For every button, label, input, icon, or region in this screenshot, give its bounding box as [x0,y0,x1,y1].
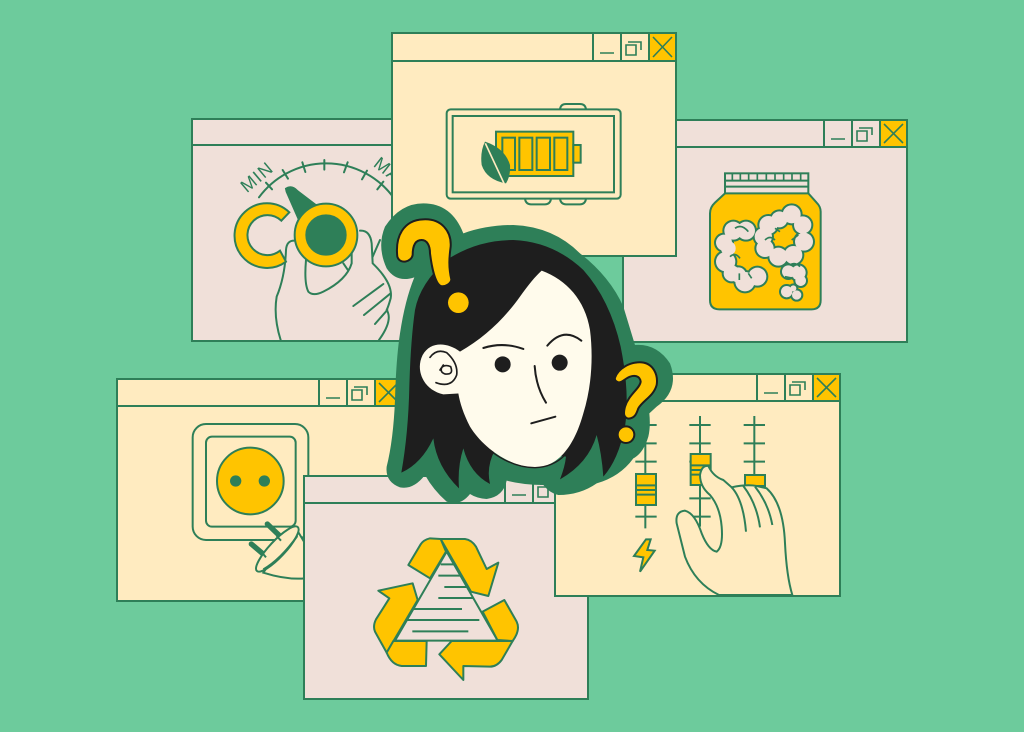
face [458,271,592,468]
eyes [495,355,568,372]
icon: CO dial with hand [235,160,393,340]
question mark right [615,362,657,443]
ear details [430,351,457,384]
panel: socket window [117,379,417,601]
nose and mouth [531,366,555,423]
panel: CO2 jar window [623,120,907,342]
panel: sliders window [555,374,840,596]
icon: recycling arrows [374,538,518,680]
icon: wall socket [193,424,308,579]
icon: jar with CO2 clouds [710,173,821,309]
panel: battery window [392,33,676,256]
question mark left [397,219,469,313]
eyebrows [483,335,581,349]
text: MIN label: MIN [237,158,277,196]
icon: battery with leaf [447,104,621,204]
icon: slider controls with hand [634,416,792,595]
panel: CO2 dial window [192,119,422,341]
panel: recycling window [304,476,588,699]
hair [401,240,627,488]
jaw line [492,452,565,468]
icon: unplugged plug [251,522,305,579]
ear [420,345,460,394]
illustration: confused woman with question marks [381,203,673,503]
sticker outline [381,203,673,503]
text: MAX label: MAX [370,153,416,195]
